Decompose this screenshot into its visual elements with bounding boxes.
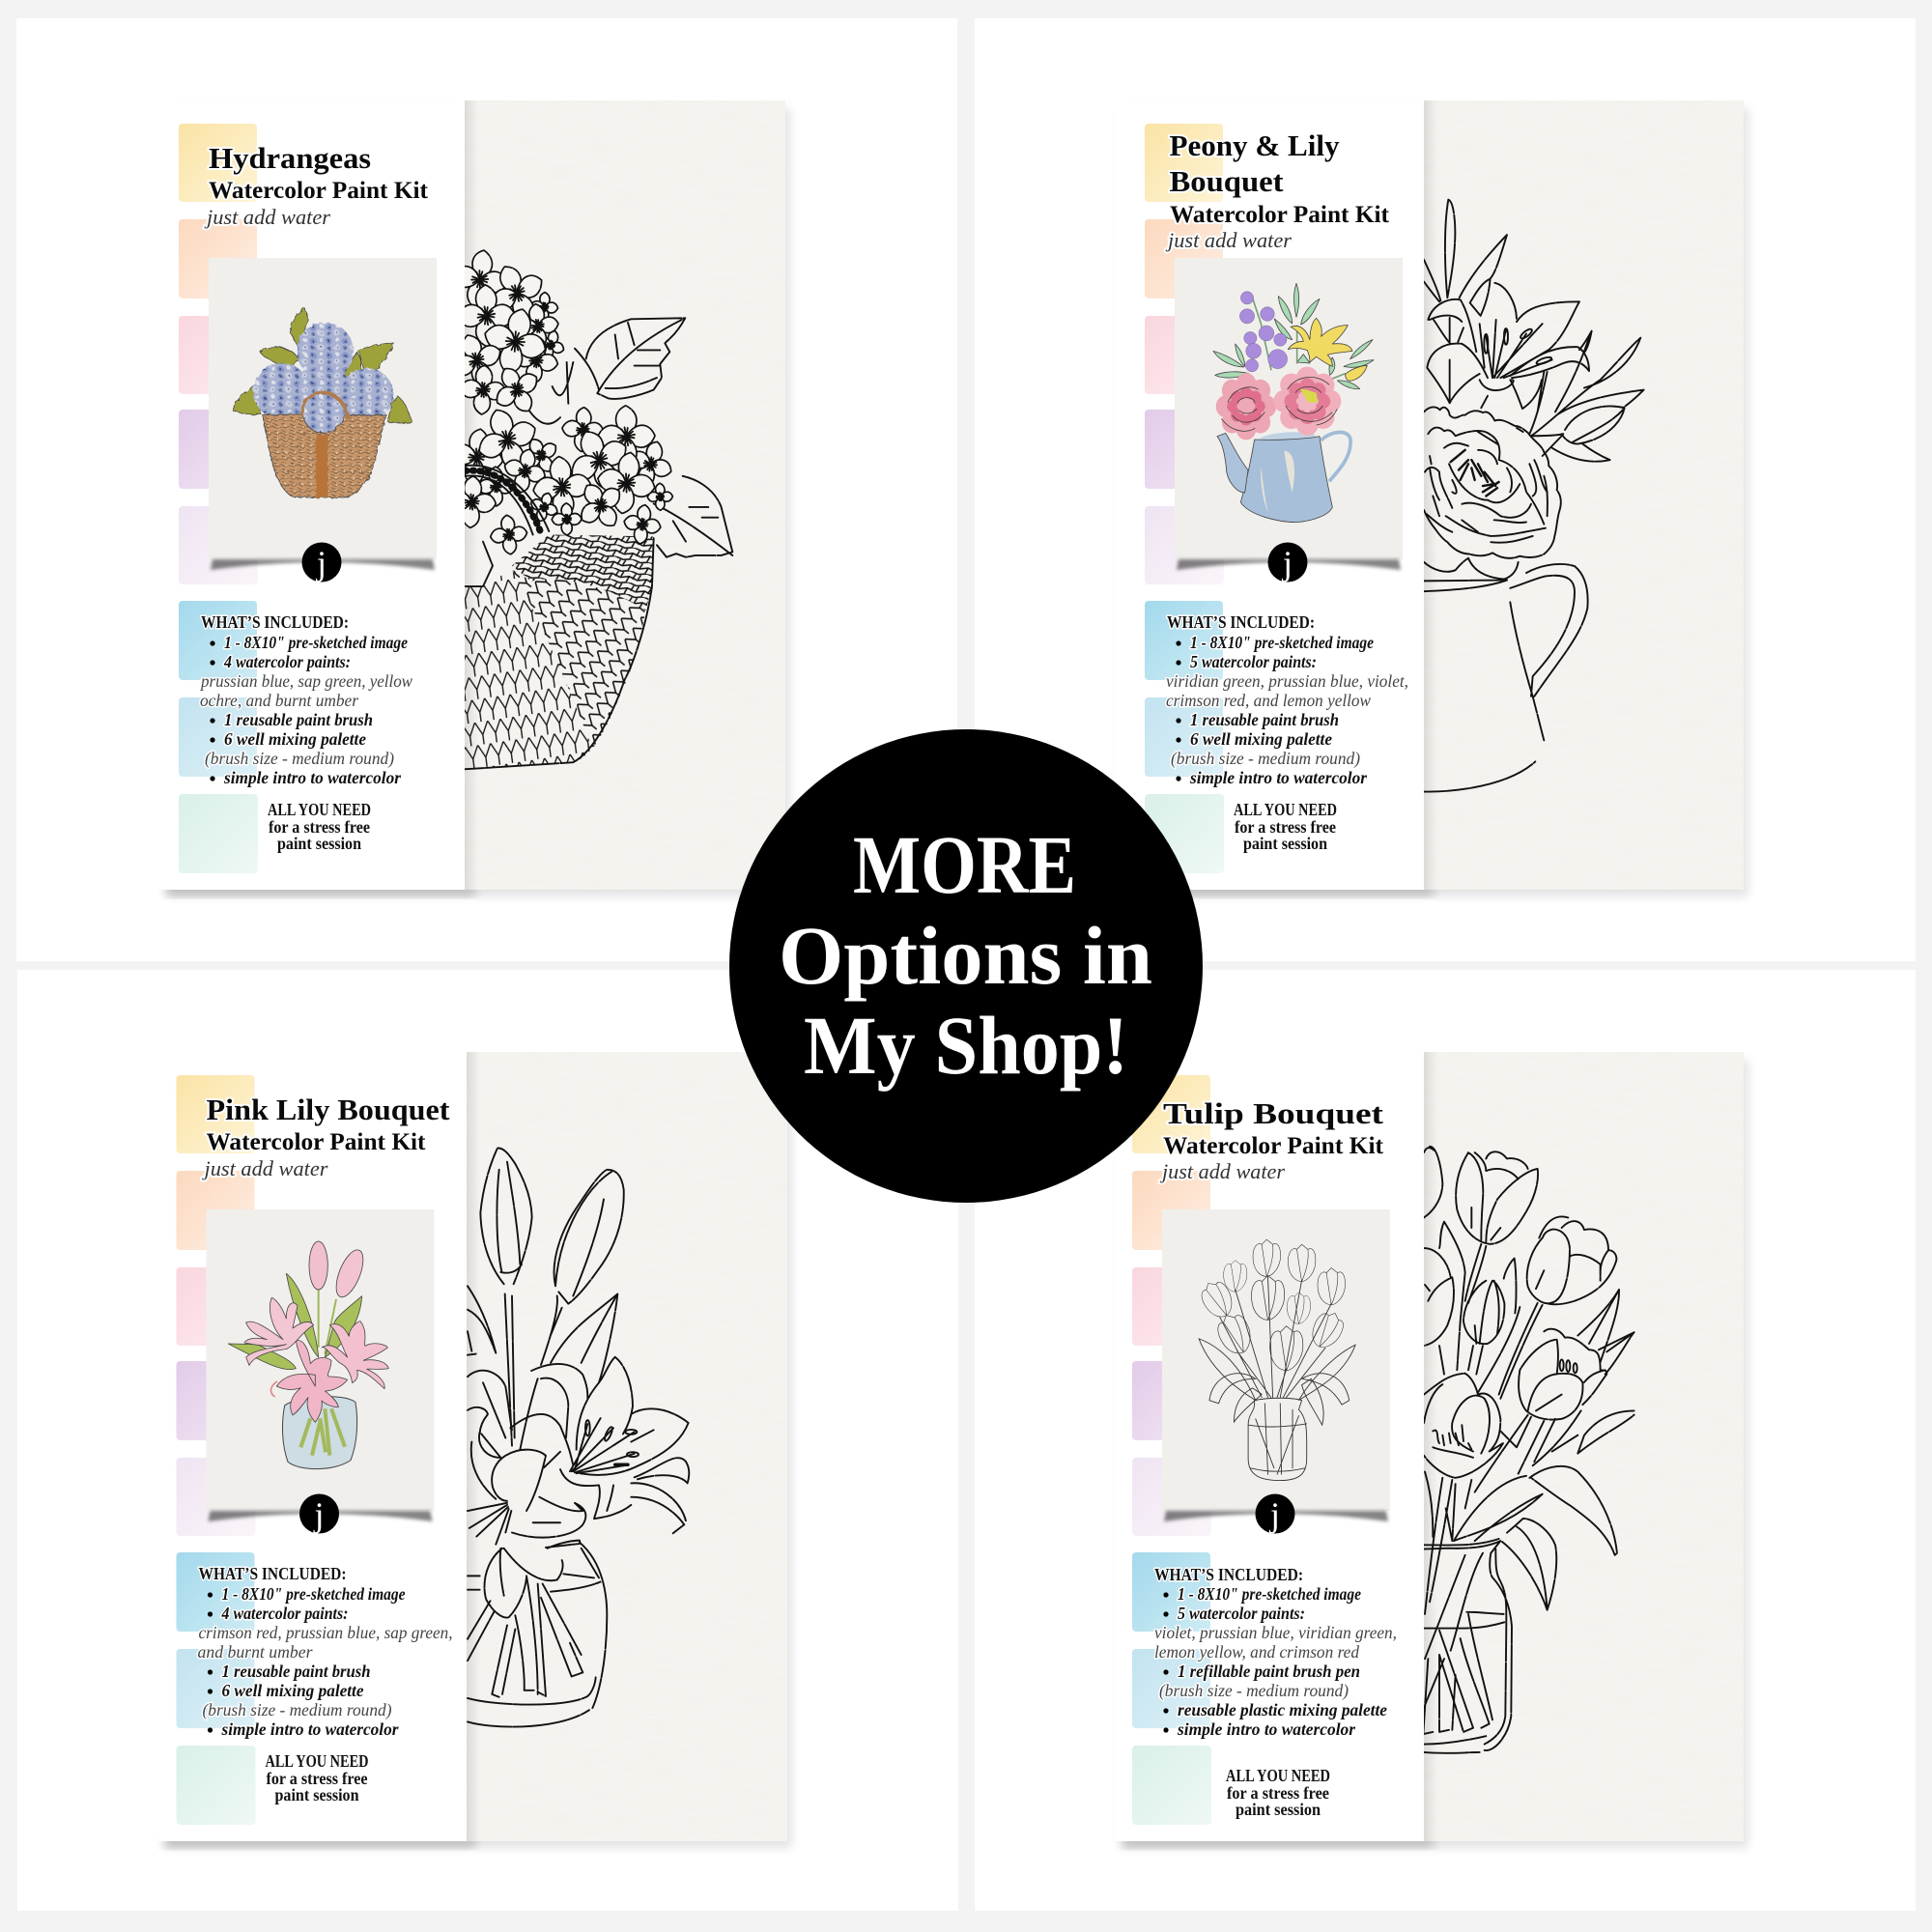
kit card [157, 100, 465, 890]
what's included list: crimson red, prussian blue, sap green, [199, 1623, 452, 1642]
watercolor paper sheet [290, 100, 785, 890]
what's included list: 4 watercolor paints: [221, 1604, 348, 1623]
what's included list: ochre, and burnt umber [200, 691, 359, 710]
what's included list: viridian green, prussian blue, violet, [1166, 671, 1408, 691]
what's included list: and burnt umber [197, 1642, 313, 1662]
product thumbnail [1162, 1209, 1390, 1511]
closing note: paint session [1243, 834, 1327, 853]
closing note: for a stress free [1227, 1783, 1329, 1803]
watercolor swatches [1145, 124, 1224, 873]
title [204, 141, 429, 229]
what's included list: reusable plastic mixing palette [1178, 1700, 1387, 1719]
callout text [779, 818, 1152, 1092]
what's included list: 1 - 8X10" pre-sketched image [1190, 633, 1374, 652]
title: Bouquet [1169, 164, 1284, 198]
sheet shadow [164, 1060, 792, 1849]
panel: pink lily [17, 970, 958, 1911]
watercolor swatches [176, 1075, 255, 1825]
title: Peony & Lily [1169, 128, 1340, 162]
logo badge [1177, 543, 1401, 582]
kit card [1115, 1052, 1424, 1841]
what's included list: 1 reusable paint brush [224, 710, 373, 729]
title: just add water [1165, 228, 1292, 252]
what's included list: (brush size - medium round) [203, 1700, 392, 1720]
what's included list: 1 - 8X10" pre-sketched image [1178, 1584, 1361, 1604]
what's included list: WHAT’S INCLUDED: [1154, 1565, 1303, 1584]
closing note [265, 1751, 369, 1804]
closing note [268, 800, 371, 853]
line art: pink lilies in jar [468, 1148, 689, 1727]
what's included list: simple intro to watercolor [223, 768, 401, 787]
sheet shadow [1121, 1060, 1748, 1849]
what's included list: 1 - 8X10" pre-sketched image [222, 1584, 406, 1604]
logo badge [211, 543, 435, 582]
watercolor swatches [179, 124, 258, 873]
what's included list: (brush size - medium round) [1159, 1681, 1349, 1701]
callout text: My Shop! [804, 999, 1128, 1092]
panel: tulip [975, 970, 1916, 1911]
sheet shadow [1121, 108, 1748, 897]
what's included list: WHAT’S INCLUDED: [1167, 612, 1315, 632]
what's included list: 1 reusable paint brush [1190, 710, 1339, 729]
title: just add water [201, 1156, 328, 1180]
what's included list: simple intro to watercolor [1177, 1719, 1355, 1739]
line art: peony lily teapot [1424, 200, 1644, 792]
what's included list: simple intro to watercolor [1189, 768, 1367, 787]
closing note: ALL YOU NEED [268, 800, 371, 819]
what's included list: 6 well mixing palette [222, 1681, 364, 1700]
what's included list: 1 - 8X10" pre-sketched image [224, 633, 408, 652]
what's included list: violet, prussian blue, viridian green, [1154, 1623, 1397, 1642]
what's included list: simple intro to watercolor [221, 1719, 399, 1739]
what's included list: 5 watercolor paints: [1190, 652, 1317, 671]
what's included list: 6 well mixing palette [1190, 729, 1332, 749]
title [201, 1093, 450, 1180]
closing note: paint session [277, 834, 361, 853]
what's included list: crimson red, and lemon yellow [1166, 691, 1371, 710]
closing note: ALL YOU NEED [265, 1751, 369, 1771]
what's included list: (brush size - medium round) [1171, 749, 1360, 769]
closing note: for a stress free [267, 1769, 368, 1788]
product thumbnail [1175, 258, 1403, 559]
kit card [1115, 100, 1424, 890]
line art: hydrangea basket [442, 242, 732, 769]
closing note: paint session [274, 1785, 359, 1804]
title: just add water [204, 205, 330, 229]
closing note: for a stress free [269, 817, 370, 837]
what's included list: 1 refillable paint brush pen [1178, 1662, 1360, 1681]
closing note [1226, 1766, 1330, 1819]
closing note [1234, 800, 1337, 853]
callout text: Options in [779, 909, 1152, 1002]
logo badge [209, 1493, 433, 1534]
product thumbnail [207, 1209, 435, 1511]
title: Watercolor Paint Kit [207, 1129, 426, 1155]
title: Pink Lily Bouquet [207, 1093, 450, 1126]
callout badge: more options [729, 729, 1203, 1203]
title: Watercolor Paint Kit [209, 178, 429, 204]
what's included list: 6 well mixing palette [224, 729, 366, 749]
closing note: ALL YOU NEED [1226, 1766, 1330, 1785]
title: Watercolor Paint Kit [1163, 1133, 1384, 1159]
what's included list: WHAT’S INCLUDED: [199, 1564, 346, 1583]
watercolor swatches [1132, 1075, 1211, 1825]
closing note: paint session [1236, 1800, 1321, 1819]
panel: hydrangeas [16, 18, 957, 961]
what's included list [197, 1564, 452, 1739]
callout text: MORE [853, 818, 1076, 911]
what's included list: 4 watercolor paints: [223, 652, 351, 671]
line art: tulips in jar [1423, 1147, 1634, 1753]
title: Tulip Bouquet [1163, 1096, 1384, 1130]
what's included list [1166, 612, 1408, 787]
watercolor paper sheet [1256, 1052, 1744, 1841]
closing note: ALL YOU NEED [1234, 800, 1337, 819]
what's included list: WHAT’S INCLUDED: [201, 612, 349, 632]
title [1165, 128, 1390, 252]
what's included list [1154, 1565, 1397, 1739]
what's included list: lemon yellow, and crimson red [1154, 1642, 1360, 1662]
logo badge [1164, 1493, 1388, 1534]
what's included list: prussian blue, sap green, yellow [199, 671, 412, 691]
watercolor paper sheet [1256, 100, 1744, 890]
title: Watercolor Paint Kit [1170, 202, 1390, 228]
title: just add water [1159, 1159, 1285, 1183]
what's included list: (brush size - medium round) [205, 749, 394, 769]
what's included list [199, 612, 412, 787]
kit card [157, 1052, 467, 1841]
what's included list: 1 reusable paint brush [222, 1662, 371, 1681]
sheet shadow [166, 108, 790, 897]
title: Hydrangeas [209, 141, 371, 175]
title [1159, 1096, 1384, 1183]
panel: peony and lily [975, 18, 1916, 961]
closing note: for a stress free [1235, 817, 1336, 837]
product thumbnail [209, 258, 437, 559]
watercolor paper sheet [290, 1052, 787, 1841]
what's included list: 5 watercolor paints: [1178, 1604, 1305, 1623]
